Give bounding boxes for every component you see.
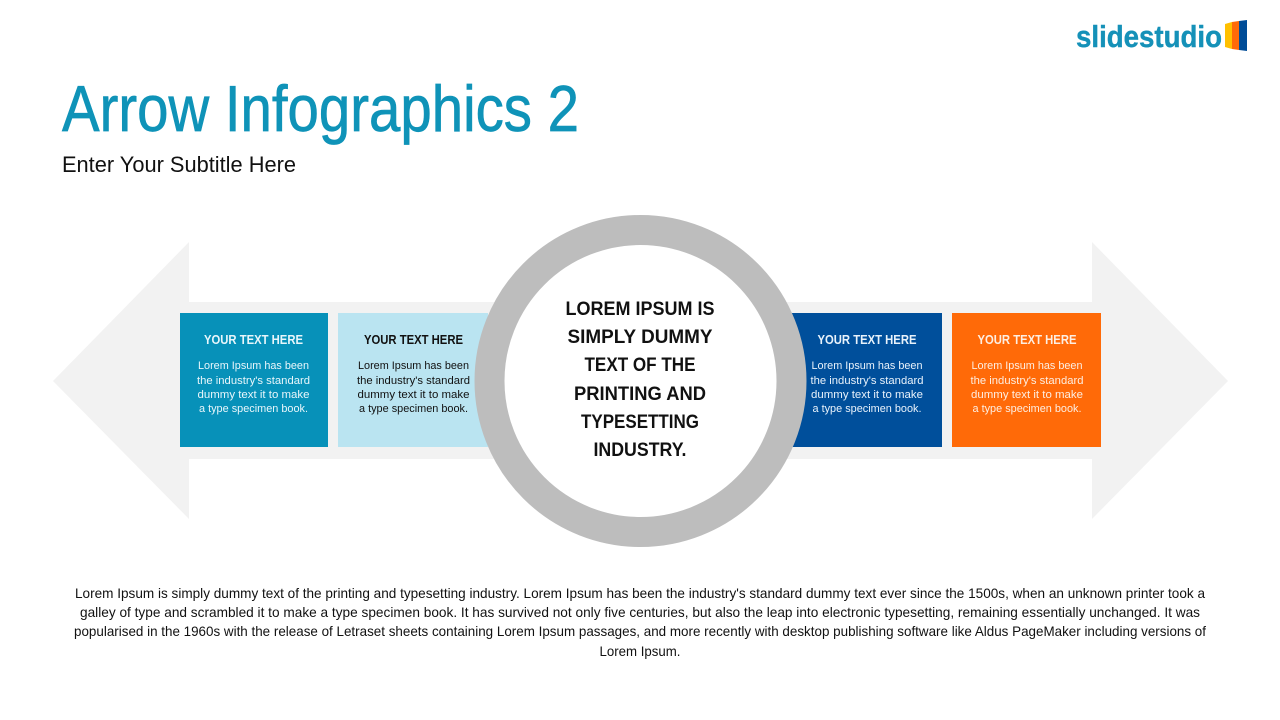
center circle: TYPESETTING xyxy=(581,412,699,433)
subtitle: Enter Your Subtitle Here xyxy=(62,152,296,177)
card 3: navy xyxy=(780,313,942,447)
center circle: INDUSTRY. xyxy=(594,440,686,461)
card 1: teal xyxy=(180,313,328,447)
body paragraph: galley of type and scrambled it to make a type specimen book. It has survived not only five centuries, but also the leap into electronic typesetting, remaining essentially unchanged. It was xyxy=(80,604,1200,620)
card 4: orange: the industry's standard xyxy=(970,375,1084,387)
logo: slidestudio: slidestudio xyxy=(1076,19,1222,54)
body paragraph: Lorem Ipsum. xyxy=(600,643,680,659)
title: Arrow Infographics 2 xyxy=(62,72,579,145)
card 3: navy: YOUR TEXT HERE xyxy=(818,332,917,347)
card 4: orange: YOUR TEXT HERE xyxy=(978,332,1077,347)
card 4: orange: Lorem Ipsum has been xyxy=(972,360,1082,372)
card 1: teal: dummy text it to make xyxy=(198,389,310,401)
card 2: light blue: YOUR TEXT HERE xyxy=(364,332,463,347)
body paragraph xyxy=(74,585,1206,659)
center circle: PRINTING AND xyxy=(574,384,706,405)
body paragraph: popularised in the 1960s with the release of Letraset sheets containing Lorem Ipsum passages, and more recently with desktop publishing software like Aldus PageMaker including versions of xyxy=(74,623,1206,639)
card 1: teal: Lorem Ipsum has been xyxy=(198,360,309,372)
card 1: teal: the industry's standard xyxy=(197,375,310,387)
center circle xyxy=(490,230,792,532)
card 4: orange: dummy text it to make xyxy=(971,389,1083,401)
card 2: light blue: Lorem Ipsum has been xyxy=(358,360,469,372)
card 2: light blue xyxy=(338,313,488,447)
center circle: TEXT OF THE xyxy=(584,355,696,376)
card 1: teal: a type specimen book. xyxy=(199,403,308,415)
card 3: navy: Lorem Ipsum has been xyxy=(812,360,922,372)
card 4: orange xyxy=(952,313,1101,447)
double-headed arrow background xyxy=(53,242,1228,519)
card 1: teal: YOUR TEXT HERE xyxy=(204,332,303,347)
center circle: SIMPLY DUMMY xyxy=(568,327,713,348)
card 3: navy: a type specimen book. xyxy=(812,403,922,415)
card 3: navy: dummy text it to make xyxy=(811,389,923,401)
card 2: light blue: a type specimen book. xyxy=(359,403,468,415)
card 2: light blue: the industry's standard xyxy=(357,375,470,387)
center circle: LOREM IPSUM IS xyxy=(566,299,714,320)
card 3: navy: the industry's standard xyxy=(810,375,924,387)
card 2: light blue: dummy text it to make xyxy=(358,389,470,401)
body paragraph: Lorem Ipsum is simply dummy text of the printing and typesetting industry. Lorem Ipsum has been the industry's standard dummy text ever since the 1500s, when an unknown printer took a xyxy=(75,585,1205,601)
card 4: orange: a type specimen book. xyxy=(972,403,1082,415)
